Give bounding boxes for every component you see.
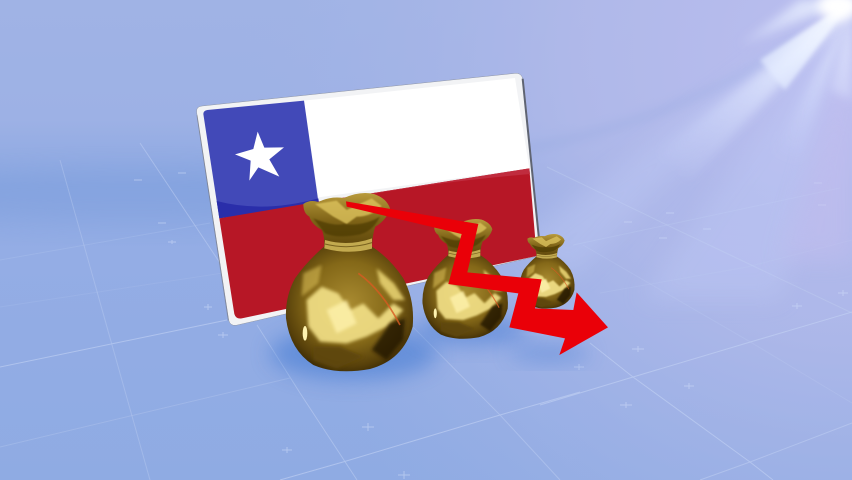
illustration group in 3x coordinates bbox=[197, 73, 608, 380]
small gold bag bbox=[520, 234, 575, 309]
floor grid lines bbox=[0, 143, 852, 480]
red falling arrow bbox=[346, 201, 608, 355]
plus markers on floor bbox=[134, 173, 848, 479]
sun rays in top-right corner bbox=[520, 0, 852, 300]
medium gold bag bbox=[422, 219, 508, 339]
star bbox=[235, 132, 284, 181]
large gold bag bbox=[286, 193, 413, 371]
white band bbox=[304, 78, 529, 197]
red band bbox=[219, 168, 537, 318]
flag card bbox=[197, 73, 541, 325]
shadows on floor bbox=[270, 315, 590, 380]
card frame bbox=[197, 73, 541, 325]
blue canton bbox=[203, 101, 318, 218]
